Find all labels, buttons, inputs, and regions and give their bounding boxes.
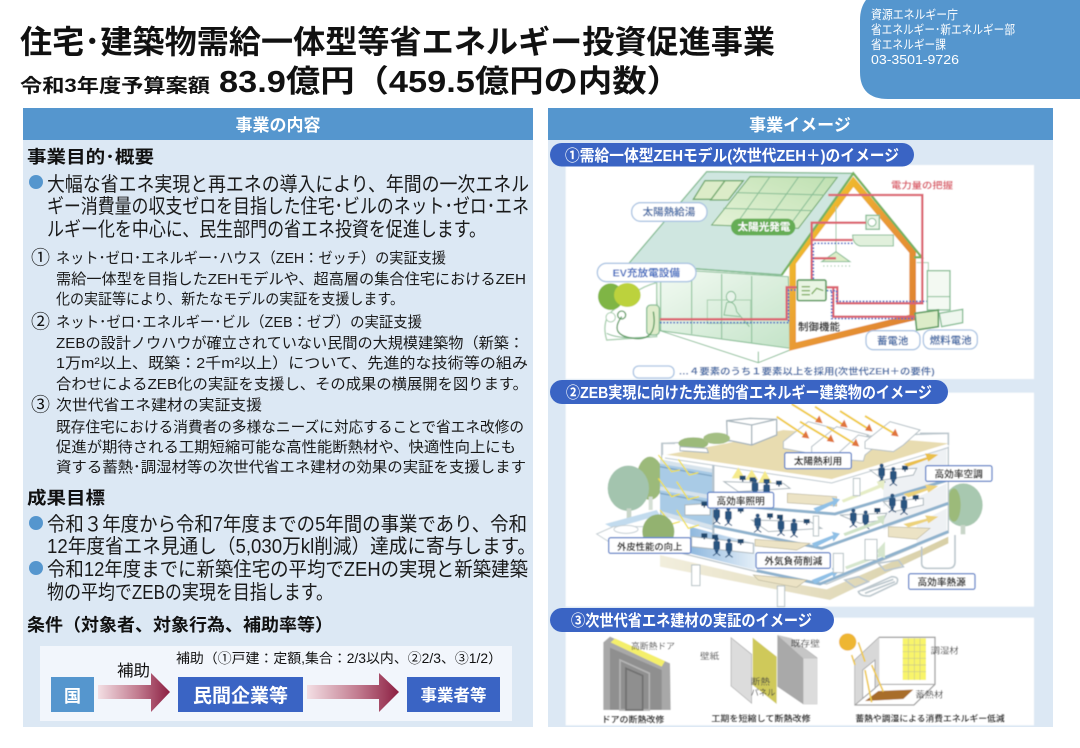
panel: 事業の内容 [23,108,536,727]
captions: 工期を短縮して断熱改修 [711,713,811,724]
contact block: 資源エネルギー庁 [871,8,958,22]
roof [662,430,948,483]
pipes and heat source [845,535,955,596]
text block: overview: ルギー化を中心に、民生部門の省エネ投資を促進します。 [47,218,486,241]
text block: item 2 ZEB: 合わせによるZEB化の実証を支援し、その成果の横展開を図ります。 [56,376,528,393]
label: 燃料電池 [923,330,977,349]
trees [608,457,983,534]
arrow: 民間企業等 to 事業者等 [307,673,399,712]
text block: item 1 ZEH: ① [31,247,50,269]
text block: goals: 令和12年度までに新築住宅の平均でZEHの実現と新築建築 [47,558,528,581]
budget line: 83.9億円（459.5億円の内数） [219,64,681,99]
heading: 条件: 条件（対象者、対象行為、補助率等） [27,615,333,635]
beige furniture [753,493,930,587]
desks [685,468,923,553]
text block: item 3 building materials: 次世代省エネ建材の実証支援 [56,397,262,414]
pill heading: ZEH model: ①需給一体型ZEHモデル(次世代ZEH＋)のイメージ [565,146,899,165]
electricity lines [660,195,922,319]
ceiling lights [732,467,772,483]
illustration: building materials [566,618,1034,725]
contact block [860,0,1080,99]
pill heading: ZEB building: ②ZEB実現に向けた先進的省エネルギー建築物のイメージ [566,383,932,402]
office workers [701,464,919,557]
label: 高効率空調 [926,466,992,481]
people [692,478,877,607]
panel header: 事業の内容 [23,108,533,140]
subsidy rates: 補助（①戸建：定額,集合：2/3以内、②2/3、③1/2） [176,651,502,666]
label: 高効率熱源: 高効率熱源 [918,576,966,588]
text block: item 2 ZEB: ネット･ゼロ･エネルギー･ビル（ZEB：ゼブ）の実証支援 [56,313,422,331]
label: 外気負荷削減 [756,553,830,568]
HEMS controller [797,280,826,301]
door illustration: 高断熱ドア [631,640,675,651]
room illustration: 蓄熱材 [915,689,944,700]
contact block: 省エネルギー･新エネルギー部 [871,23,1015,37]
green trim [782,173,922,275]
wall panel illustration: パネル [751,688,776,698]
air flow arrows [812,453,938,584]
box: 国 [51,677,94,712]
text block: item 3 building materials: 促進が期待される工期短縮可能な高性能断熱材や、快適性向上にも [56,439,516,456]
pill heading: building materials: ③次世代省エネ建材の実証のイメージ [571,611,812,630]
text block: item 1 ZEH [31,247,526,308]
title: 住宅･建築物需給一体型等省エネルギー投資促進事業 [20,24,775,60]
heading: 事業目的・概要: 事業目的･概要 [27,147,154,167]
floor slabs [713,480,948,584]
panel header: 事業の内容: 事業の内容 [236,115,320,135]
text block: overview: 大幅な省エネ実現と再エネの導入により、年間の一次エネル [47,173,529,196]
wall panel illustration: 断熱 [751,675,770,686]
label: 電力量の把握: 電力量の把握 [891,180,954,191]
illustration: ZEB building [566,393,1034,607]
text block: goals: 12年度省エネ見通し（5,030万kl削減）達成に寄与します。 [47,535,536,558]
text block: item 2 ZEB [31,311,528,393]
box: 事業者等: 事業者等 [420,685,486,705]
data lines [660,243,927,323]
label: 太陽熱給湯 [632,203,707,221]
subsidy flow diagram [40,646,512,721]
illustration: ZEH house [566,165,1034,379]
solar PV array [712,177,837,228]
label: 太陽熱利用: 太陽熱利用 [794,456,842,468]
label: 高効率空調: 高効率空調 [935,469,983,481]
label: 太陽熱給湯: 太陽熱給湯 [643,206,695,219]
contact block: 省エネルギー課 [871,38,946,52]
label: 太陽光発電 [731,219,795,235]
text block: item 3 building materials: 資する蓄熱･調湿材等の次世代省エネ建材の効果の実証を支援します [56,458,526,476]
glass facade [660,459,755,570]
label: 燃料電池: 燃料電池 [930,334,972,347]
label: 太陽光発電: 太陽光発電 [738,221,790,234]
budget line [20,64,681,99]
pill heading: ZEB building [550,380,948,404]
facade light rays [658,455,699,528]
label: EV充放電設備: EV充放電設備 [613,267,681,280]
text block: overview: ギー消費量の収支ゼロを目指した住宅･ビルのネット･ゼロ･エネ [47,195,529,218]
label: 蓄電池 [866,331,920,350]
text block: item 3 building materials [31,394,526,476]
text block: item 3 building materials: 既存住宅における消費者の多様なニーズに対応することで省エネ改修の [56,418,524,436]
label: 外気負荷削減: 外気負荷削減 [764,555,823,567]
label: 蓄電池: 蓄電池 [877,334,909,347]
pill heading: ZEH model [550,143,914,166]
text block: goals: 物の平均でZEBの実現を目指します。 [47,581,333,604]
house frame [793,182,913,347]
label: 補助: 補助 [117,662,150,680]
text block: goals: 令和３年度から令和7年度までの5年間の事業であり、令和 [47,513,527,536]
heading: 成果目標: 成果目標 [27,488,106,508]
label: 制御機能: 制御機能 [798,321,840,334]
room illustration [839,633,959,705]
panel header: 事業イメージ [548,108,1053,140]
solar thermal panels [693,181,725,199]
legend: …４要素のうち１要素以上を採用(次世代ZEH＋の要件) [679,365,935,376]
pill heading: building materials [550,608,834,632]
building body [662,433,948,584]
interior back walls [883,447,947,547]
text block: item 2 ZEB: ② [31,311,50,333]
wall panel illustration [700,635,820,704]
front wall with windows [628,264,790,363]
label: 高効率照明 [708,492,774,508]
text block: item 2 ZEB: 1万m²以上、既築：2千m²以上）について、先進的な技術等の組み [56,354,528,372]
roof [628,172,853,275]
budget line: 令和3年度予算案額 [20,74,210,97]
room illustration: 調湿材 [931,645,959,656]
captions [602,713,1005,724]
text block: item 2 ZEB: ZEBの設計ノウハウが確立されていない民間の大規模建築物（新築： [56,334,524,352]
text block: item 1 ZEH: 化の実証等により、新たなモデルの実証を支援します。 [56,290,404,308]
box: 民間企業等 [178,677,303,712]
legend [633,365,935,378]
solar collectors [783,422,920,461]
rooftop equipment [678,418,777,453]
label: 高効率照明: 高効率照明 [717,495,765,507]
text block: item 1 ZEH: ネット･ゼロ･エネルギー･ハウス（ZEH：ゼッチ）の実証支援 [56,250,446,267]
EV car and charger [605,283,659,340]
label: 外皮性能の向上: 外皮性能の向上 [617,541,682,552]
entrance plaza [597,510,660,553]
contact block: 03-3501-9726 [871,52,959,67]
tree in front [642,514,674,549]
text block: overview [29,173,529,241]
captions: 蓄熱や調湿による消費エネルギー低減 [855,713,1005,724]
box: 事業者等 [407,677,500,712]
label: EV充放電設備 [597,263,696,282]
wall panel illustration: 既存壁 [791,638,820,649]
air conditioner, light, panel devices [822,207,893,266]
panel header: 事業イメージ: 事業イメージ [749,116,851,135]
panel: 事業イメージ [548,108,1053,727]
label: 太陽熱利用 [785,453,851,469]
wall panel illustration: 壁紙 [700,650,720,661]
label: 高効率熱源 [909,574,975,589]
door illustration [603,637,675,710]
label: 外皮性能の向上 [609,538,691,553]
text block: goals [29,513,536,604]
arrow: 国 to 民間企業等 [98,673,170,712]
box: 国: 国 [64,687,81,706]
captions: ドアの断熱改修 [602,713,665,724]
bushes [598,283,641,310]
storage tanks [915,263,963,330]
building base [660,537,948,600]
text block: item 3 building materials: ③ [31,394,50,416]
box: 民間企業等: 民間企業等 [193,685,288,707]
sun rays [777,404,899,447]
text block: item 1 ZEH: 需給一体型を目指したZEHモデルや、超高層の集合住宅におけるZEH [56,270,526,288]
